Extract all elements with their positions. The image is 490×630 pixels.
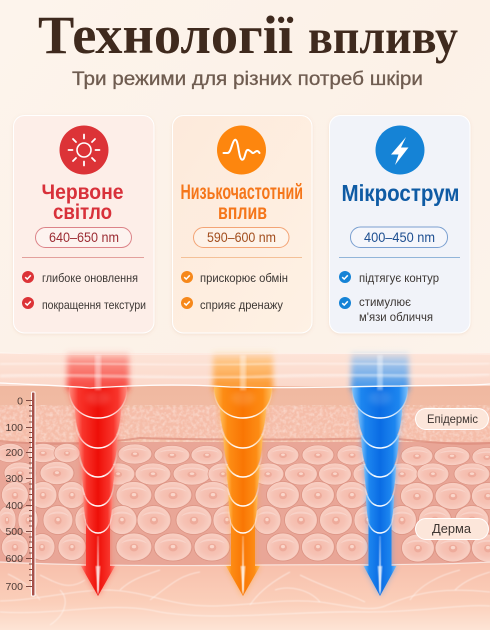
arrow: red light (67, 352, 129, 596)
benefit: face muscles: м'язи обличчя (359, 310, 433, 324)
check icon (22, 271, 34, 283)
label: dermis (416, 518, 488, 540)
panel: low-frequency card (172, 116, 312, 333)
wavelength pill (194, 228, 289, 248)
card title: red light: світло (53, 201, 112, 224)
depth ruler: 300 (5, 473, 23, 485)
check icon (181, 271, 193, 283)
benefit: texture: покращення текстури (42, 298, 146, 312)
label: epidermis (416, 408, 488, 430)
wavelength pill: 590–600 nm (207, 229, 276, 245)
arrow: orange low-frequency (213, 352, 273, 596)
label: dermis: Дерма (432, 522, 471, 536)
label: epidermis: Епідерміс (427, 412, 478, 426)
skin surface sheen (0, 353, 490, 388)
lower dermis with fibre lines (0, 562, 490, 630)
benefit: drainage: сприяє дренажу (200, 298, 283, 312)
benefit: metabolism: прискорює обмін (200, 271, 288, 285)
icon: wave (217, 126, 266, 174)
benefit: contour: підтягує контур (359, 271, 439, 285)
check icon (339, 271, 351, 283)
benefit: deep renewal: глибоке оновлення (42, 271, 138, 285)
title (38, 5, 458, 65)
depth ruler (5, 392, 35, 596)
title: Технології (38, 5, 294, 65)
depth ruler: 600 (5, 553, 23, 565)
card title: microcurrent: Мікрострум (342, 180, 460, 206)
depth ruler: 700 (5, 581, 23, 593)
panel: microcurrent card (330, 116, 470, 333)
wavelength pill: 640–650 nm (49, 229, 119, 245)
card title: red light (42, 181, 124, 224)
benefit: face muscles (359, 295, 433, 324)
icon: sun (60, 126, 108, 174)
depth ruler: 200 (5, 447, 23, 459)
arrow: blue microcurrent (351, 352, 409, 596)
depth ruler: 100 (5, 422, 23, 434)
benefit: face muscles: стимулює (359, 295, 411, 309)
card title: low-frequency (180, 181, 303, 224)
card title: low-frequency: вплив (218, 201, 267, 224)
dermal cell rows (0, 444, 490, 562)
skin layers (0, 353, 490, 567)
check icon (181, 297, 193, 309)
wavelength pill (350, 227, 448, 248)
subtitle: Три режими для різних потреб шкіри (72, 68, 423, 90)
card title: red light: Червоне (42, 181, 124, 204)
depth ruler: 400 (5, 500, 23, 512)
wavelength pill: 400–450 nm (364, 229, 435, 245)
depth ruler: 0 (17, 396, 23, 408)
check icon (339, 297, 351, 309)
icon: lightning (376, 126, 424, 174)
panel: red light card (14, 116, 154, 333)
wavelength pill (36, 228, 132, 248)
title: впливу (308, 9, 458, 64)
check icon (22, 297, 34, 309)
depth ruler: 500 (5, 526, 23, 538)
card title: low-frequency: Низькочастотний (180, 181, 303, 204)
